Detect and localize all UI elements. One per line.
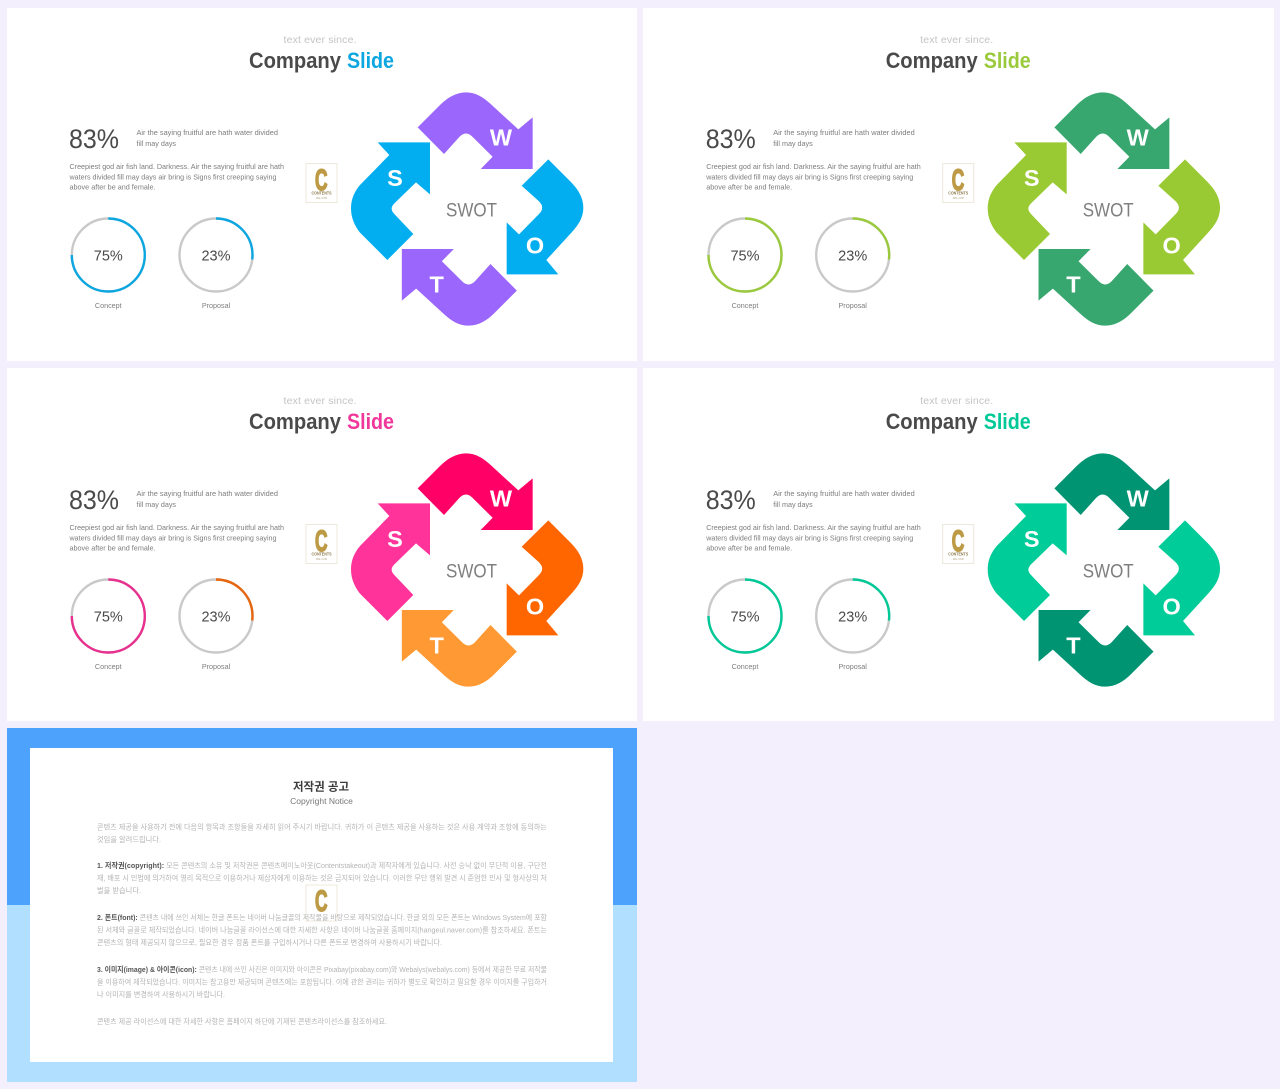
title	[249, 409, 394, 434]
panel: teal SWOT slide	[643, 368, 1274, 721]
text block: description	[705, 162, 921, 192]
title: Slide	[347, 48, 394, 73]
panel: copyright notice	[7, 728, 637, 1082]
text block: statistic note: fill may days	[773, 139, 813, 148]
ring chart: concept 75%	[708, 580, 782, 671]
subtitle: text ever since.	[284, 34, 356, 46]
arrow: W	[418, 453, 533, 530]
ring chart: concept 75%: 75%	[730, 248, 760, 264]
panel: pink and orange SWOT slide	[7, 368, 637, 721]
text block: image clause	[97, 964, 547, 999]
text block: statistic note: Air the saying fruitful are hath water divided	[773, 128, 915, 137]
text block: intro	[97, 822, 547, 844]
SWOT letters: S	[387, 526, 403, 552]
SWOT letters: O	[1163, 594, 1181, 620]
arrow: S	[351, 503, 430, 621]
text block: statistic note: fill may days	[773, 500, 813, 509]
icon: contents logo: CONTENTS	[948, 552, 968, 556]
ring chart: concept 75%: 75%	[730, 610, 760, 626]
text block: copyright clause: 1. 저작권(copyright): 모든 콘텐츠의 소유 및 저작권은 콘텐츠메이노아웃(Contentstakeout)과 제작자에게 있습니다. 사전 승낙 없이 무단적 이용, 구단전	[97, 860, 547, 870]
arrow: T	[1039, 249, 1154, 326]
text block: description: above after be and female.	[706, 544, 792, 552]
arrow: W	[1054, 92, 1169, 169]
arrow: S	[351, 142, 430, 260]
icon: contents logo	[306, 164, 337, 202]
ring chart: proposal 23%: 23%	[201, 248, 231, 264]
subtitle: text ever since.	[284, 395, 356, 407]
SWOT letters	[1024, 124, 1181, 298]
ring chart: proposal 23%: Proposal	[202, 662, 231, 671]
text block: statistic note	[773, 489, 915, 509]
text block: font clause: 콘텐츠의 형태 제공되지 않으므로, 필요한 경우 정품 폰트를 구입하시거나 다른 폰트로 변경하여 사용하시기 바랍니다.	[97, 937, 442, 947]
text block: description	[69, 523, 284, 552]
text block: statistic note: Air the saying fruitful are hath water divided	[136, 128, 278, 137]
text block: statistic note: fill may days	[136, 500, 176, 509]
icon: contents logo: MAL.COM	[953, 196, 964, 200]
arrow: T	[1039, 610, 1154, 687]
text block: statistic note	[773, 128, 915, 148]
center label: SWOT	[1083, 200, 1134, 222]
text block: copyright clause: 벌을 받습니다.	[97, 885, 141, 895]
icon: contents logo: MAL.COM	[316, 557, 328, 561]
text block: description	[69, 162, 284, 192]
icon: contents logo: C	[315, 164, 328, 197]
title	[886, 409, 1031, 434]
ring chart: proposal 23%: Proposal	[839, 301, 867, 310]
text block: description: Creepiest god air fish land. Darkness. Air the saying fruitful are hath	[706, 523, 921, 532]
text block: image clause: 을 이용하여 제작되었습니다. 이미지는 참고용만 제공되며 콘텐츠에는 포함됩니다. 이에 관한 권리는 귀하가 별도로 확인하고 필요할 경우 이미지를 구입하거	[97, 976, 547, 986]
text block: image clause: 나 이미지를 변경하여 사용하시기 바랍니다.	[97, 989, 225, 999]
arrow: O	[507, 159, 583, 274]
ring chart: concept 75%: Concept	[95, 662, 122, 671]
text block: description: above after be and female.	[706, 182, 792, 192]
ring chart: concept 75%	[708, 218, 782, 310]
ring chart: proposal 23%: Proposal	[839, 662, 867, 671]
icon: contents logo: CONTENTS	[948, 190, 968, 196]
text block: description: above after be and female.	[70, 182, 156, 192]
arrow: T	[402, 610, 517, 687]
icon: contents logo	[306, 524, 337, 564]
ring chart: proposal 23%	[180, 218, 252, 310]
ring chart: concept 75%	[72, 580, 145, 671]
title: Slide	[984, 48, 1031, 73]
SWOT letters: S	[1024, 526, 1040, 552]
ring chart: proposal 23%	[816, 218, 889, 310]
text block: font clause	[97, 912, 547, 947]
icon: contents logo: C	[315, 525, 328, 558]
icon: contents logo: MAL.COM	[953, 557, 964, 561]
text block: description: Creepiest god air fish land. Darkness. Air the saying fruitful are hath	[70, 162, 284, 171]
title: Company	[249, 409, 342, 434]
text block: statistic note: Air the saying fruitful are hath water divided	[773, 489, 915, 498]
title	[886, 48, 1031, 73]
arrow: T	[402, 249, 517, 326]
icon: contents logo: C	[315, 885, 328, 918]
SWOT letters: O	[526, 594, 544, 620]
title	[249, 48, 394, 73]
SWOT letters	[387, 124, 544, 298]
statistic: 83%: 83%	[69, 485, 119, 515]
text block: description: waters divided fill may days air bring is Signs first creeping saying	[705, 534, 913, 542]
ring chart: proposal 23%: Proposal	[202, 301, 231, 310]
center label: SWOT	[446, 560, 497, 582]
icon: contents logo: C	[952, 164, 964, 197]
ring chart: concept 75%: Concept	[95, 301, 122, 310]
icon: contents logo	[943, 524, 974, 564]
text block: statistic note	[136, 128, 278, 148]
SWOT letters: S	[1024, 165, 1040, 191]
title: Slide	[984, 409, 1031, 434]
text block: description: waters divided fill may days air bring is Signs first creeping saying	[69, 534, 276, 542]
icon: contents logo: CONTENTS	[312, 190, 332, 196]
arrow: S	[988, 142, 1067, 260]
SWOT letters: T	[1066, 272, 1081, 298]
text block: image clause: 3. 이미지(image) & 아이콘(icon): 콘텐츠 내에 쓰인 사진은 이미지와 아이콘은 Pixabay(pixabay.com)와 Webalys(webalys.com) 등에서 제공한 무료 저작물	[97, 964, 547, 974]
title: Company	[249, 48, 342, 73]
ring chart: concept 75%: Concept	[732, 301, 758, 310]
icon: contents logo: CONTENTS	[312, 552, 332, 556]
arrow: W	[418, 92, 533, 169]
ring chart: proposal 23%: 23%	[838, 610, 867, 626]
statistic: 83%: 83%	[706, 485, 756, 515]
SWOT letters: T	[1066, 632, 1081, 658]
icon: contents logo	[943, 164, 974, 202]
icon: contents logo: C	[952, 525, 964, 558]
text block: intro: 것임을 알려드립니다.	[97, 834, 161, 844]
text block: statistic note: Air the saying fruitful are hath water divided	[136, 489, 278, 498]
text block: license note: 콘텐츠 제공 라이선스에 대한 자세한 사항은 홈페이지 하단에 기재된 콘텐츠라이선스를 참조하세요.	[97, 1016, 387, 1026]
arrow: O	[507, 520, 583, 635]
SWOT letters: W	[1127, 486, 1150, 512]
icon: contents logo: MAL.COM	[316, 196, 328, 200]
panel: green SWOT slide	[643, 8, 1274, 361]
text block: font clause: 된 서체와 글꼴로 제작되었습니다. 네이버 나눔글꼴 라이선스에 대한 자세한 사항은 네이버 나눔글꼴 홈페이지(hangeul.naver.com)를 참조하세요. 폰트는	[97, 924, 547, 934]
text block: statistic note: fill may days	[136, 139, 176, 148]
SWOT letters: W	[490, 486, 513, 512]
arrow: W	[1054, 453, 1169, 530]
subheading: Copyright Notice	[290, 796, 353, 806]
icon: contents logo	[306, 885, 337, 921]
statistic: 83%: 83%	[69, 124, 119, 154]
SWOT letters	[1024, 486, 1181, 658]
arrow: O	[1143, 520, 1220, 635]
center label: SWOT	[446, 200, 497, 222]
ring chart: proposal 23%	[816, 580, 889, 671]
title: Company	[886, 48, 978, 73]
title: Company	[886, 409, 978, 434]
SWOT letters: T	[430, 632, 445, 658]
text block: description: waters divided fill may days air bring is Signs first creeping saying	[705, 172, 913, 182]
text block: description: above after be and female.	[70, 544, 156, 552]
heading: copyright notice: 저작권 공고	[293, 780, 349, 794]
ring chart: concept 75%: 75%	[94, 248, 123, 264]
ring chart: proposal 23%	[180, 580, 252, 671]
SWOT letters: W	[490, 124, 513, 150]
text block: description: Creepiest god air fish land. Darkness. Air the saying fruitful are hath	[706, 162, 921, 171]
SWOT letters	[387, 486, 544, 658]
text block: description: waters divided fill may days air bring is Signs first creeping saying	[69, 172, 276, 182]
subtitle: text ever since.	[920, 395, 993, 407]
text block: copyright clause: 재, 배포 시 민법에 의거하여 영리 목적으로 이용하거나 제삼자에게 이용하는 것은 금지되어 있습니다. 이러한 무단 행위 발견 시 준엄한 민사 및 형사상의 처	[97, 872, 547, 882]
SWOT letters: O	[526, 232, 544, 258]
text block: copyright clause	[97, 860, 547, 895]
text block: intro: 콘텐츠 제공을 사용하기 전에 다음의 항목과 조항들을 자세히 읽어 주시기 바랍니다. 귀하가 이 콘텐츠 제공을 사용하는 것은 사용 계약과 조항에 동의하는	[97, 822, 547, 832]
text block: description	[705, 523, 921, 552]
ring chart: proposal 23%: 23%	[201, 610, 231, 626]
statistic: 83%: 83%	[706, 124, 756, 154]
text block: font clause: 2. 폰트(font): 콘텐츠 내에 쓰인 서체는 한글 폰트는 네이버 나눔글꼴의 저작물을 바탕으로 제작되었습니다. 한글 외의 모든 폰트는 Windows System에 포함	[97, 912, 547, 922]
ring chart: concept 75%: 75%	[94, 610, 123, 626]
arrow: S	[988, 503, 1067, 621]
ring chart: proposal 23%: 23%	[838, 248, 867, 264]
SWOT letters: O	[1163, 232, 1181, 258]
subtitle: text ever since.	[920, 34, 993, 46]
title: Slide	[347, 409, 394, 434]
SWOT letters: T	[430, 272, 445, 298]
SWOT letters: W	[1127, 124, 1150, 150]
panel: blue and purple SWOT slide	[7, 8, 637, 361]
SWOT letters: S	[387, 165, 403, 191]
text block: description: Creepiest god air fish land. Darkness. Air the saying fruitful are hath	[70, 523, 284, 532]
text block: statistic note	[136, 489, 278, 509]
ring chart: concept 75%	[72, 218, 145, 310]
center label: SWOT	[1083, 560, 1134, 582]
arrow: O	[1143, 159, 1220, 274]
ring chart: concept 75%: Concept	[732, 662, 758, 671]
